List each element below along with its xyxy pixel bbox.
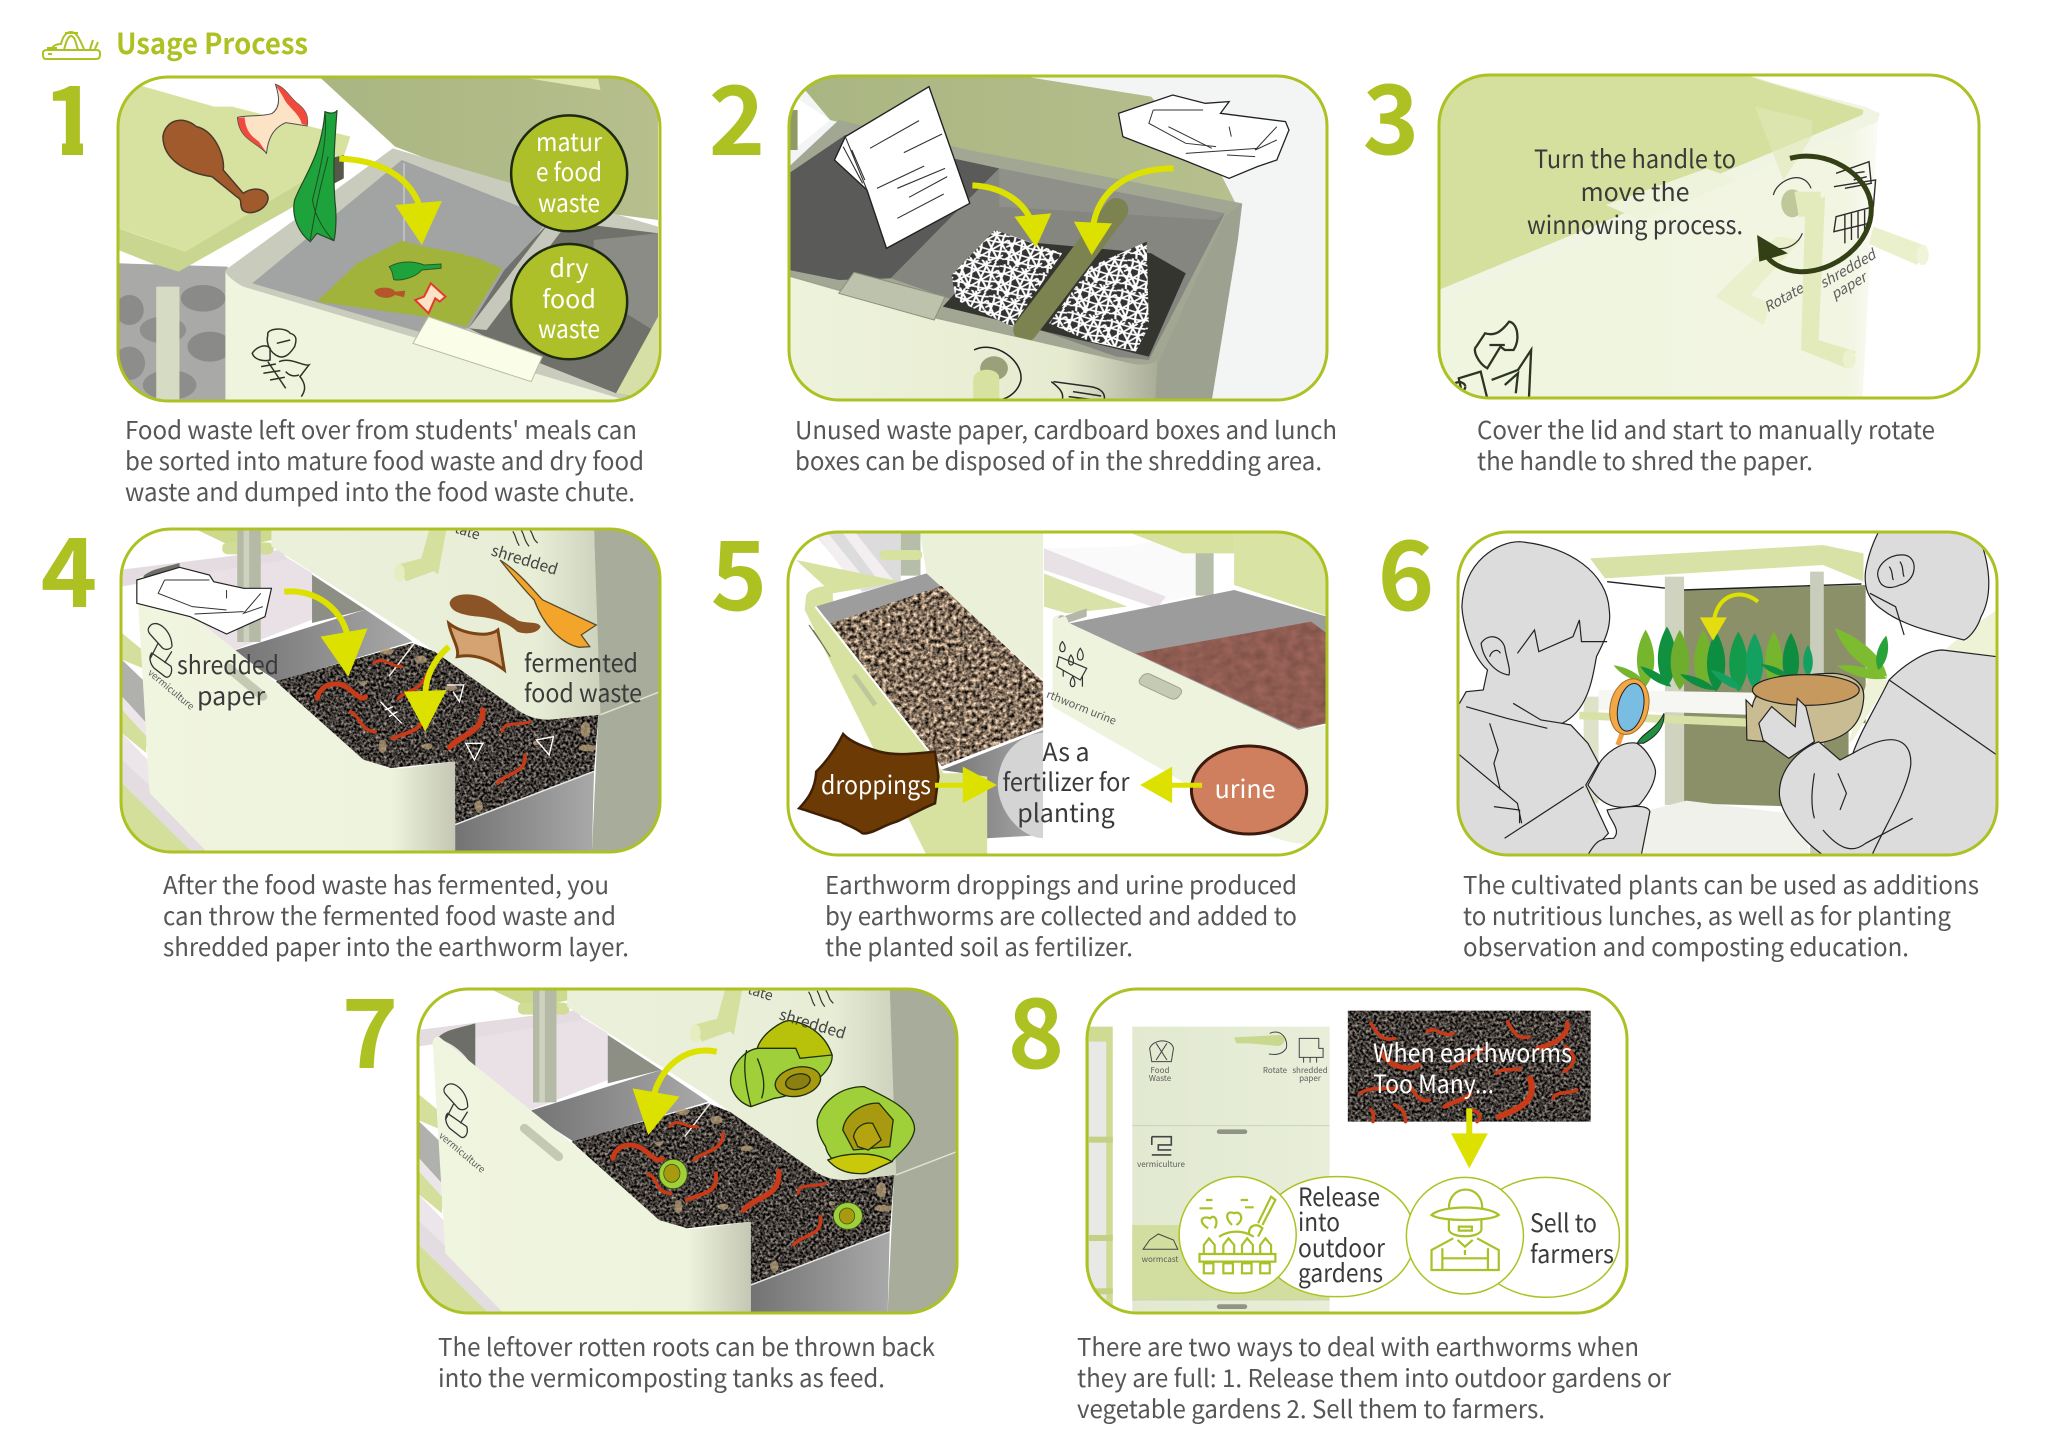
description: step 4: can throw the fermented food waste and xyxy=(163,898,616,933)
description: step 3: Cover the lid and start to manually rotate xyxy=(1477,412,1935,447)
description: step 6: observation and composting education. xyxy=(1463,929,1909,964)
droppings blob xyxy=(799,734,938,833)
panel: step 4 feeding the earthworm layer: food waste xyxy=(524,674,642,710)
bubble: sell to farmers xyxy=(1406,1177,1619,1297)
arrow xyxy=(1451,1108,1488,1168)
icon: food waste logo xyxy=(1453,322,1531,398)
step number 8: 8 xyxy=(1008,957,1064,1096)
panel: step 5 droppings and urine as fertilizer: fertilizer for xyxy=(1002,763,1130,799)
icon: leaf xyxy=(294,110,337,242)
panel: step 8 too many earthworms: Rotate xyxy=(1263,1065,1288,1076)
arrow: rotate direction xyxy=(1757,156,1871,272)
bubble: release into outdoor gardens xyxy=(1179,1177,1414,1297)
step number 1: 1 xyxy=(43,44,99,183)
panel: step 8 too many earthworms: Release xyxy=(1298,1178,1380,1214)
icon: chicken leg xyxy=(163,120,268,213)
panel: step 8 too many earthworms: Sell to xyxy=(1530,1204,1597,1240)
icon: food waste logo xyxy=(252,329,309,397)
panel: step 8 too many earthworms: When earthworms xyxy=(1373,1034,1572,1070)
description: step 8: they are full: 1. Release them into outdoor gardens or xyxy=(1077,1360,1671,1395)
magnifying glass xyxy=(1605,677,1653,745)
panel: step 4 feeding the earthworm layer: tate xyxy=(452,518,483,545)
description: step 8 xyxy=(1077,1329,1671,1426)
description: step 5: Earthworm droppings and urine produced xyxy=(825,867,1297,902)
icon: waste paper sheet xyxy=(834,87,970,248)
description: step 4: After the food waste has fermented, you xyxy=(163,867,609,902)
panel: step 1 sorting food waste xyxy=(114,77,660,401)
panel: step 1 sorting food waste: matur xyxy=(536,123,602,159)
droppings tray xyxy=(830,586,1043,767)
icon: farmer xyxy=(1432,1190,1499,1270)
icon: fermented apple core xyxy=(449,623,504,670)
panel: step 3 turn the handle: paper xyxy=(1827,266,1872,304)
icon: fermented chicken leg xyxy=(450,594,541,633)
label bubble: mature food waste xyxy=(511,115,627,231)
description: step 5: by earthworms are collected and added to xyxy=(825,898,1297,933)
panel: step 3 turn the handle: winnowing process. xyxy=(1527,206,1743,242)
panel: step 7 rotten roots as feed: tate xyxy=(745,979,776,1006)
panel: step 8 too many earthworms: Waste xyxy=(1149,1073,1172,1084)
description: step 6: to nutritious lunches, as well as for planting xyxy=(1463,898,1951,933)
arrow xyxy=(339,159,442,245)
person: adult xyxy=(1759,532,1997,855)
panel: step 8 too many earthworms: into xyxy=(1298,1203,1340,1239)
held plant xyxy=(1835,628,1888,680)
panel: step 8 too many earthworms: farmers xyxy=(1530,1235,1614,1271)
worms and scraps xyxy=(317,660,530,783)
panel: step 3 turn the handle: move the xyxy=(1580,173,1690,209)
description: step 2 xyxy=(795,412,1337,478)
description: step 8: vegetable gardens 2. Sell them to farmers. xyxy=(1077,1391,1545,1426)
panel: step 5 droppings and urine as fertilizer: planting xyxy=(1017,794,1115,830)
composting tower front xyxy=(1132,1027,1330,1313)
step number 7: 7 xyxy=(342,957,398,1096)
icon: cut lettuce xyxy=(731,1021,832,1107)
description: step 7: into the vermicomposting tanks as feed. xyxy=(438,1360,885,1395)
panel: step 7 rotten roots as feed: shredded xyxy=(777,1003,849,1044)
urine circle xyxy=(1191,746,1307,834)
panel: step 1 sorting food waste: waste xyxy=(538,184,600,220)
icon: crank knob xyxy=(973,347,1021,400)
description: step 3: the handle to shred the paper. xyxy=(1477,443,1813,478)
icon: paper scroll xyxy=(1051,382,1104,401)
panel: step 4 feeding the earthworm layer: fermented xyxy=(524,644,638,680)
small lettuce scraps xyxy=(659,1159,862,1229)
panel: step 8 too many earthworms: vermiculture xyxy=(1137,1159,1185,1170)
worms xyxy=(613,1123,826,1245)
tower side strip xyxy=(1087,1027,1113,1348)
title: Usage Process xyxy=(116,21,308,63)
arrows xyxy=(935,767,1202,803)
arrow xyxy=(1700,595,1758,641)
arrows xyxy=(284,591,449,732)
panel: step 5 droppings and urine as fertilizer: urine xyxy=(1215,770,1275,806)
panel: step 7 rotten roots as feed xyxy=(418,979,957,1313)
panel: step 8 too many earthworms: shredded xyxy=(1292,1065,1328,1076)
arrow xyxy=(633,1051,717,1135)
panel: step 8 too many earthworms: wormcast xyxy=(1142,1254,1178,1265)
panel: step 2 shredding area xyxy=(789,76,1329,401)
panel: step 1 sorting food waste: food xyxy=(542,280,596,316)
icon: apple core xyxy=(237,84,308,153)
waste pile in chute xyxy=(317,241,502,327)
description: step 6: The cultivated plants can be used as additions xyxy=(1463,867,1979,902)
description: step 7 xyxy=(438,1329,935,1395)
panel: step 3 turn the handle: shredded xyxy=(1816,243,1881,293)
panel: step 5 droppings and urine as fertilizer: As a xyxy=(1042,733,1090,769)
panel: step 4 feeding the earthworm layer: shredded xyxy=(177,646,279,682)
plant row xyxy=(1611,626,1813,693)
panel: step 3 turn the handle: Rotate xyxy=(1760,278,1808,317)
person: child xyxy=(1458,542,1655,855)
description: step 2: Unused waste paper, cardboard boxes and lunch xyxy=(795,412,1337,447)
panel: step 5 droppings and urine as fertilizer: droppings xyxy=(821,766,931,802)
panel: step 4 feeding the earthworm layer: shredded xyxy=(489,539,561,580)
arrows xyxy=(972,168,1174,255)
description: step 1 xyxy=(125,412,644,509)
description: step 1: waste and dumped into the food waste chute. xyxy=(125,474,635,509)
description: step 4 xyxy=(163,867,629,964)
panel: step 8 too many earthworms: outdoor xyxy=(1298,1229,1385,1265)
panel: step 3 turn the handle: Turn the handle to xyxy=(1534,140,1736,176)
panel: step 1 sorting food waste: dry xyxy=(550,249,588,285)
panel: step 1 sorting food waste: e food xyxy=(536,153,602,189)
panel: step 6 planting observation xyxy=(1458,532,1997,855)
fertilizer circle xyxy=(998,732,1044,838)
description: step 7: The leftover rotten roots can be thrown back xyxy=(438,1329,935,1364)
icon: crumpled cardboard xyxy=(1119,95,1289,178)
panel: step 3 turn the handle xyxy=(1439,75,1979,398)
right half: urine tray xyxy=(1044,532,1327,844)
description: step 2: boxes can be disposed of in the shredding area. xyxy=(795,443,1322,478)
panel: step 1 sorting food waste: waste xyxy=(538,310,600,346)
step number 3: 3 xyxy=(1363,43,1419,182)
description: step 5: the planted soil as fertilizer. xyxy=(825,929,1133,964)
step number 2: 2 xyxy=(709,44,765,183)
icon: fermented leaf xyxy=(500,560,596,647)
title icon: worm on soil xyxy=(43,32,100,59)
description: step 3 xyxy=(1477,412,1935,478)
panel: step 4 feeding the earthworm layer: vermiculture xyxy=(145,665,198,713)
panel: step 5 droppings and urine as fertilizer: rthworm urine xyxy=(1044,686,1119,729)
panel: step 5 droppings and urine as fertilizer xyxy=(788,532,1327,855)
photo: soil with worms xyxy=(1348,1011,1591,1122)
description: step 4: shredded paper into the earthworm layer. xyxy=(163,929,629,964)
description: step 1: Food waste left over from students' meals can xyxy=(125,412,637,447)
description: step 6 xyxy=(1463,867,1979,964)
panel: step 8 too many earthworms: Food xyxy=(1151,1065,1170,1076)
panel: step 8 too many earthworms xyxy=(1087,989,1627,1348)
description: step 5 xyxy=(825,867,1297,964)
description: step 8: There are two ways to deal with earthworms when xyxy=(1077,1329,1639,1364)
panel: step 4 feeding the earthworm layer: paper xyxy=(197,677,266,713)
panel: step 8 too many earthworms: paper xyxy=(1299,1073,1322,1084)
bowl of soil xyxy=(1746,673,1864,745)
icon: shredder xyxy=(1834,162,1876,243)
step number 5: 5 xyxy=(711,499,767,638)
step number 4: 4 xyxy=(41,496,97,635)
label bubble: dry food waste xyxy=(511,244,627,359)
panel: step 4 feeding the earthworm layer xyxy=(121,518,661,852)
icon: crumpled paper xyxy=(137,567,271,634)
icon: garden fence xyxy=(1200,1197,1275,1273)
step number 6: 6 xyxy=(1378,499,1434,638)
crank handle xyxy=(1715,178,1929,369)
panel: step 7 rotten roots as feed: vermiculture xyxy=(436,1128,489,1176)
description: step 1: be sorted into mature food waste and dry food xyxy=(125,443,644,478)
panel: step 8 too many earthworms: Too Many... xyxy=(1373,1065,1494,1101)
panel: step 8 too many earthworms: gardens xyxy=(1298,1254,1383,1290)
icon: lettuce head xyxy=(817,1087,915,1174)
